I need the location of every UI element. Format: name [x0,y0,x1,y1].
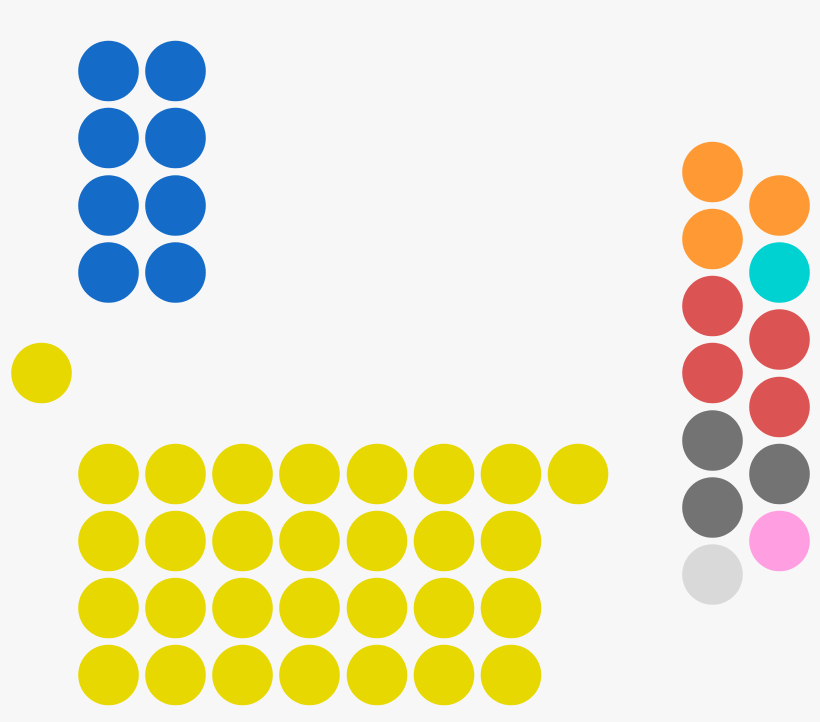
pink seat [749,511,810,571]
teal seat [749,242,810,303]
yellow seats block [78,444,608,705]
orange seats [682,142,810,269]
single yellow seat [11,343,72,403]
blue seats block [78,41,206,303]
grey seats [682,410,810,538]
light grey seat [682,544,743,605]
red seats [682,276,810,437]
